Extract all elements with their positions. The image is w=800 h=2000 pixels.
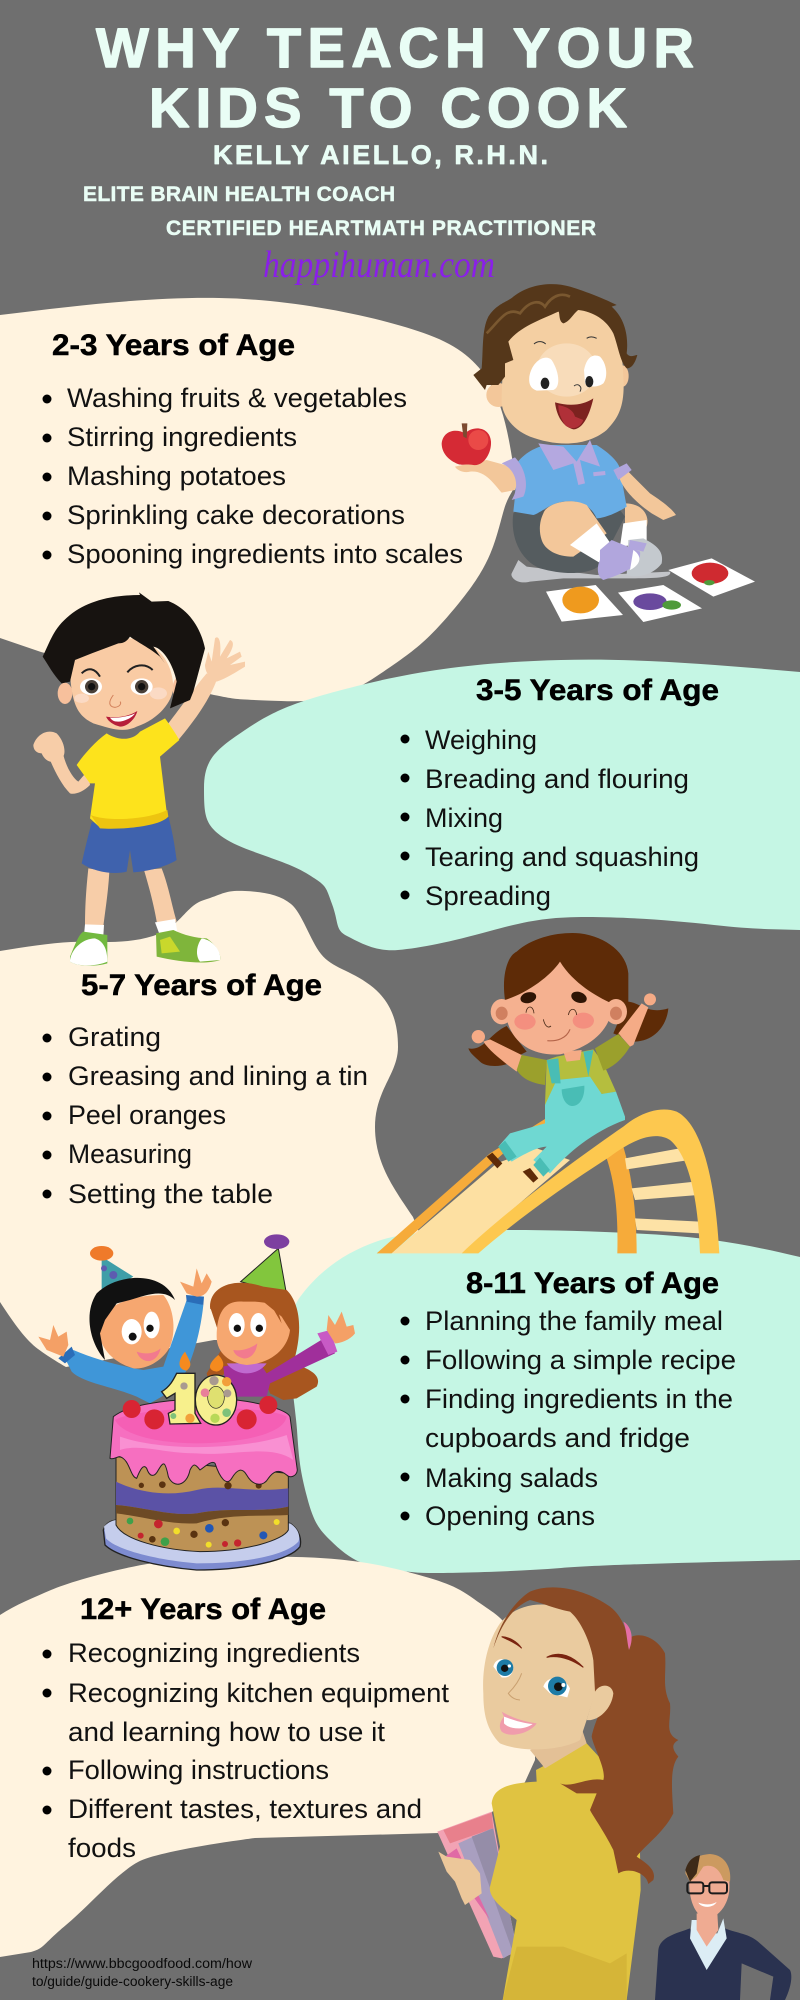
credential: brain health coach: ELITE BRAIN HEALTH COACH	[83, 183, 395, 206]
head	[491, 933, 628, 1062]
task list: Greasing and lining a tin	[68, 1061, 368, 1091]
pink icing	[110, 1399, 297, 1484]
picture cards	[546, 558, 755, 622]
apple	[442, 423, 491, 465]
task list: foods	[68, 1833, 136, 1863]
strawberries	[123, 1396, 277, 1429]
heading: 3-5 Years of Age	[476, 674, 719, 707]
arms	[472, 993, 656, 1072]
title: KIDS TO COOK	[149, 76, 627, 139]
slide	[377, 1110, 719, 1253]
author name: KELLY AIELLO, R.H.N.	[213, 140, 548, 170]
smile	[500, 1712, 537, 1735]
task list	[42, 1638, 450, 1863]
neck	[530, 1723, 587, 1768]
heading: 12+ Years of Age	[80, 1593, 326, 1626]
task list: Opening cans	[425, 1501, 595, 1531]
hair	[685, 1854, 730, 1882]
illustration: boy in yellow shirt	[33, 592, 245, 966]
section: 3-5 years	[400, 674, 719, 911]
section: 8-11 years	[400, 1267, 736, 1531]
shoes	[70, 930, 220, 966]
task list: Mashing potatoes	[67, 461, 286, 491]
plate	[103, 1520, 301, 1570]
task list: Sprinkling cake decorations	[67, 500, 405, 530]
mouth	[555, 398, 593, 429]
task list	[400, 725, 699, 911]
source link	[32, 1956, 252, 1989]
hair	[43, 592, 205, 708]
overalls	[487, 1050, 625, 1183]
jacket	[490, 1743, 641, 2000]
title	[96, 16, 694, 139]
books	[437, 1812, 517, 1958]
shorts	[82, 817, 177, 873]
panel: 3-5 years background	[204, 660, 800, 950]
hair	[473, 284, 637, 390]
section: 2-3 years	[42, 329, 463, 569]
task list: Spooning ingredients into scales	[67, 539, 463, 569]
glasses	[687, 1882, 727, 1893]
cake layers	[116, 1457, 288, 1552]
task list: Setting the table	[68, 1179, 273, 1209]
task list: Planning the family meal	[425, 1306, 723, 1336]
panel: 12+ years background	[0, 1557, 535, 1957]
hair top	[493, 1587, 630, 1693]
shirt	[77, 718, 179, 829]
task list: Tearing and squashing	[425, 842, 699, 872]
illustration: girl on slide	[377, 933, 719, 1253]
heading: 8-11 Years of Age	[466, 1267, 719, 1300]
task list: Grating	[68, 1022, 161, 1052]
heading: 5-7 Years of Age	[81, 969, 322, 1002]
website: happihuman.com	[263, 244, 495, 286]
panel: 2-3 years background	[0, 298, 515, 701]
illustration: author portrait	[655, 1854, 791, 2000]
source link: https://www.bbcgoodfood.com/how	[32, 1956, 252, 1971]
panel: 5-7 years background	[0, 891, 430, 1367]
task list: Weighing	[425, 725, 537, 755]
shirt	[690, 1918, 727, 1970]
task list: Recognizing kitchen equipment	[68, 1678, 450, 1708]
task list: and learning how to use it	[68, 1717, 385, 1747]
boy	[38, 1268, 212, 1403]
ponytail	[560, 1635, 678, 1884]
illustration: kids with birthday cake	[38, 1234, 355, 1570]
task list	[42, 1022, 368, 1209]
girl	[207, 1283, 355, 1400]
shirt	[517, 1034, 630, 1105]
panel: 8-11 years background	[290, 1230, 800, 1573]
smile	[698, 1902, 717, 1907]
task list	[42, 383, 463, 569]
task list: Recognizing ingredients	[68, 1638, 360, 1668]
credential: heartmath practitioner: CERTIFIED HEARTMATH PRACTITIONER	[166, 217, 596, 240]
illustration: woman with books	[437, 1587, 678, 2000]
source link: to/guide/guide-cookery-skills-age	[32, 1974, 233, 1989]
section: 5-7 years	[42, 969, 368, 1209]
task list: Measuring	[68, 1139, 192, 1169]
hand	[438, 1852, 482, 1905]
eyes	[493, 1637, 583, 1700]
suit	[655, 1928, 791, 2000]
task list: Following instructions	[68, 1755, 329, 1785]
task list: Breading and flouring	[425, 764, 689, 794]
task list: Stirring ingredients	[67, 422, 297, 452]
illustration: toddler with apple	[442, 284, 755, 622]
face	[70, 638, 173, 730]
task list: Mixing	[425, 803, 503, 833]
task list: Different tastes, textures and	[68, 1794, 422, 1824]
number candle	[162, 1352, 237, 1425]
face	[689, 1855, 729, 1919]
section: 12+ years	[42, 1593, 450, 1863]
party hats	[90, 1234, 289, 1295]
heading: 2-3 Years of Age	[52, 329, 295, 362]
task list: Finding ingredients in the	[425, 1384, 733, 1414]
pigtails	[468, 1002, 668, 1066]
task list: Making salads	[425, 1463, 598, 1493]
arms	[33, 637, 245, 794]
task list: Spreading	[425, 881, 551, 911]
task list: cupboards and fridge	[425, 1423, 690, 1453]
title: WHY TEACH YOUR	[96, 16, 694, 79]
task list: Washing fruits & vegetables	[67, 383, 407, 413]
eyes	[529, 337, 606, 392]
face	[483, 1605, 595, 1749]
task list: Peel oranges	[68, 1100, 226, 1130]
task list	[400, 1306, 736, 1531]
task list: Following a simple recipe	[425, 1345, 736, 1375]
